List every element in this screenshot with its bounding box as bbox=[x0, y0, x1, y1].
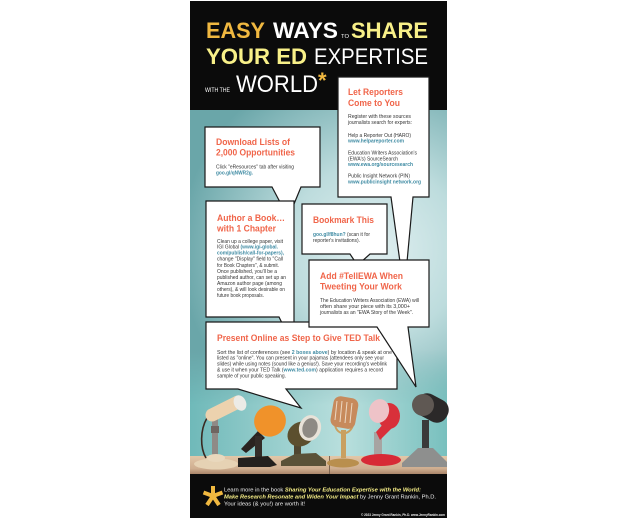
heading: let reporters: Let Reporters bbox=[348, 87, 403, 97]
text: author instructions: published author, can set up an bbox=[217, 275, 286, 281]
panel: present online bbox=[206, 322, 397, 408]
infographic canvas bbox=[190, 1, 449, 518]
copyright line: © 2023 Jenny Grant Rankin, Ph.D. www.JennyRankin.com bbox=[361, 513, 445, 517]
text: author instructions: com/publish/call-for-papers), bbox=[217, 250, 285, 256]
text: author instructions: others), & will look desirable on bbox=[217, 287, 285, 293]
text: reporter sources bbox=[347, 114, 421, 186]
heading: let reporters: Come to You bbox=[348, 98, 400, 108]
text: download instructions: Click "eResources" tab after visiting bbox=[216, 164, 294, 170]
heading: download lists: Download Lists of bbox=[216, 137, 290, 147]
text: author instructions: change "Display" field to "Call bbox=[217, 257, 283, 263]
heading: add tellewa: Add #TellEWA When bbox=[320, 271, 403, 281]
title: WAYS bbox=[273, 18, 338, 43]
text: reporter sources: Register with these sources bbox=[348, 114, 412, 120]
text: author instructions: Amazon author page (among bbox=[217, 281, 282, 287]
panel: bookmark this bbox=[302, 204, 387, 263]
icon: orange foam microphone bbox=[238, 400, 292, 467]
title: EXPERTISE bbox=[314, 44, 428, 69]
title: WITH THE bbox=[205, 88, 230, 94]
heading: download lists: 2,000 Opportunities bbox=[216, 148, 295, 158]
title: TO bbox=[341, 34, 349, 40]
text: reporter sources: Help a Reporter Out (HARO) bbox=[348, 133, 411, 139]
text: present instructions: listed as "online". You can present in your pajamas (attendees only see your bbox=[217, 356, 384, 362]
heading: add tellewa bbox=[320, 271, 403, 292]
text: reporter sources: journalists search for experts: bbox=[347, 120, 412, 126]
heading: author a book: with 1 Chapter bbox=[216, 224, 277, 234]
text: reporter sources: www.ewa.org/sourcesearch bbox=[347, 162, 413, 168]
heading: present online: Present Online as Step to Give TED Talk bbox=[217, 333, 380, 343]
icon: black and grey microphone bbox=[402, 389, 453, 467]
heading: author a book: Author a Book… bbox=[217, 213, 285, 223]
title: * bbox=[318, 68, 327, 93]
text: present instructions: & use it when your TED Talk (www.ted.com) application requires a record bbox=[217, 368, 383, 374]
footer text: Make Research Resonate and Widen Your Impact by Jenny Grant Rankin, Ph.D. bbox=[224, 494, 436, 500]
footer text: Learn more in the book Sharing Your Education Expertise with the World: bbox=[224, 488, 421, 494]
text: download instructions bbox=[216, 164, 294, 176]
wooden table bbox=[190, 456, 447, 474]
title: SHARE bbox=[351, 18, 428, 43]
title: EASY bbox=[206, 18, 265, 43]
icon: gold retro microphone bbox=[327, 395, 359, 468]
title bbox=[205, 18, 428, 98]
text: present instructions: sample of your public speaking. bbox=[217, 374, 286, 380]
text: tellewa explanation: often share your piece with its 3,000+ bbox=[320, 304, 410, 310]
text: author instructions: future book proposals. bbox=[217, 293, 264, 299]
text: present instructions: slides) while using notes (sound like a genius!). Save your recording's weblink bbox=[217, 362, 387, 368]
text: reporter sources: Public Insight Network (PIN) bbox=[348, 174, 410, 180]
text: present instructions bbox=[217, 350, 392, 380]
text: author instructions: Once published, you'll be a bbox=[217, 269, 277, 275]
footer text: Your ideas (& you!) are worth it! bbox=[224, 502, 305, 508]
text: author instructions: Clean up a college paper, visit bbox=[217, 239, 284, 245]
heading: download lists bbox=[216, 137, 295, 158]
text: tellewa explanation: journalists as an "EWA Story of the Week". bbox=[319, 310, 413, 316]
text: reporter sources: (EWA's) SourceSearch bbox=[348, 156, 398, 162]
text: bookmark link: reporter's invitations). bbox=[313, 238, 360, 244]
heading: let reporters bbox=[348, 87, 403, 108]
text: author instructions bbox=[217, 239, 286, 299]
text: download instructions: goo.gl/qNWR2g. bbox=[216, 170, 254, 176]
text: present instructions: Sort the list of conferences (see 2 boxes above ) by location & speak at one bbox=[217, 350, 392, 356]
panel: author a book bbox=[206, 201, 294, 325]
panel: let reporters come to you bbox=[338, 77, 429, 262]
icon: cream microphone bbox=[194, 393, 249, 470]
text: tellewa explanation bbox=[319, 298, 419, 316]
text: author instructions: for Book Chapters", & submit. bbox=[217, 263, 279, 269]
icon: bronze microphone bbox=[281, 413, 326, 466]
text: reporter sources: www.helpareporter.com bbox=[347, 138, 405, 144]
background photo area bbox=[190, 105, 447, 460]
heading: add tellewa: Tweeting Your Work bbox=[320, 282, 402, 292]
text: tellewa explanation: The Education Writers Association (EWA) will bbox=[320, 298, 419, 304]
microphones bbox=[194, 389, 453, 470]
text: bookmark link bbox=[313, 232, 370, 244]
title: YOUR ED bbox=[206, 44, 307, 69]
text: reporter sources: Education Writers Association's bbox=[348, 150, 417, 156]
heading: author a book bbox=[216, 213, 285, 234]
panel: add tellewa bbox=[309, 260, 429, 387]
footer band bbox=[190, 474, 447, 518]
text: reporter sources: www.publicinsight network.org bbox=[347, 180, 421, 186]
title: WORLD bbox=[236, 71, 318, 98]
header band bbox=[190, 1, 447, 110]
icon: red microphone bbox=[361, 397, 401, 466]
icon: gold asterisk bbox=[204, 486, 222, 505]
text: bookmark link: goo.gl/f8hun? (scan it for bbox=[313, 232, 370, 238]
text: author instructions: IGI Global (www.igi-global. bbox=[217, 244, 279, 250]
panel: download lists bbox=[205, 127, 320, 204]
footer text bbox=[224, 488, 436, 508]
heading: bookmark this: Bookmark This bbox=[313, 215, 374, 225]
